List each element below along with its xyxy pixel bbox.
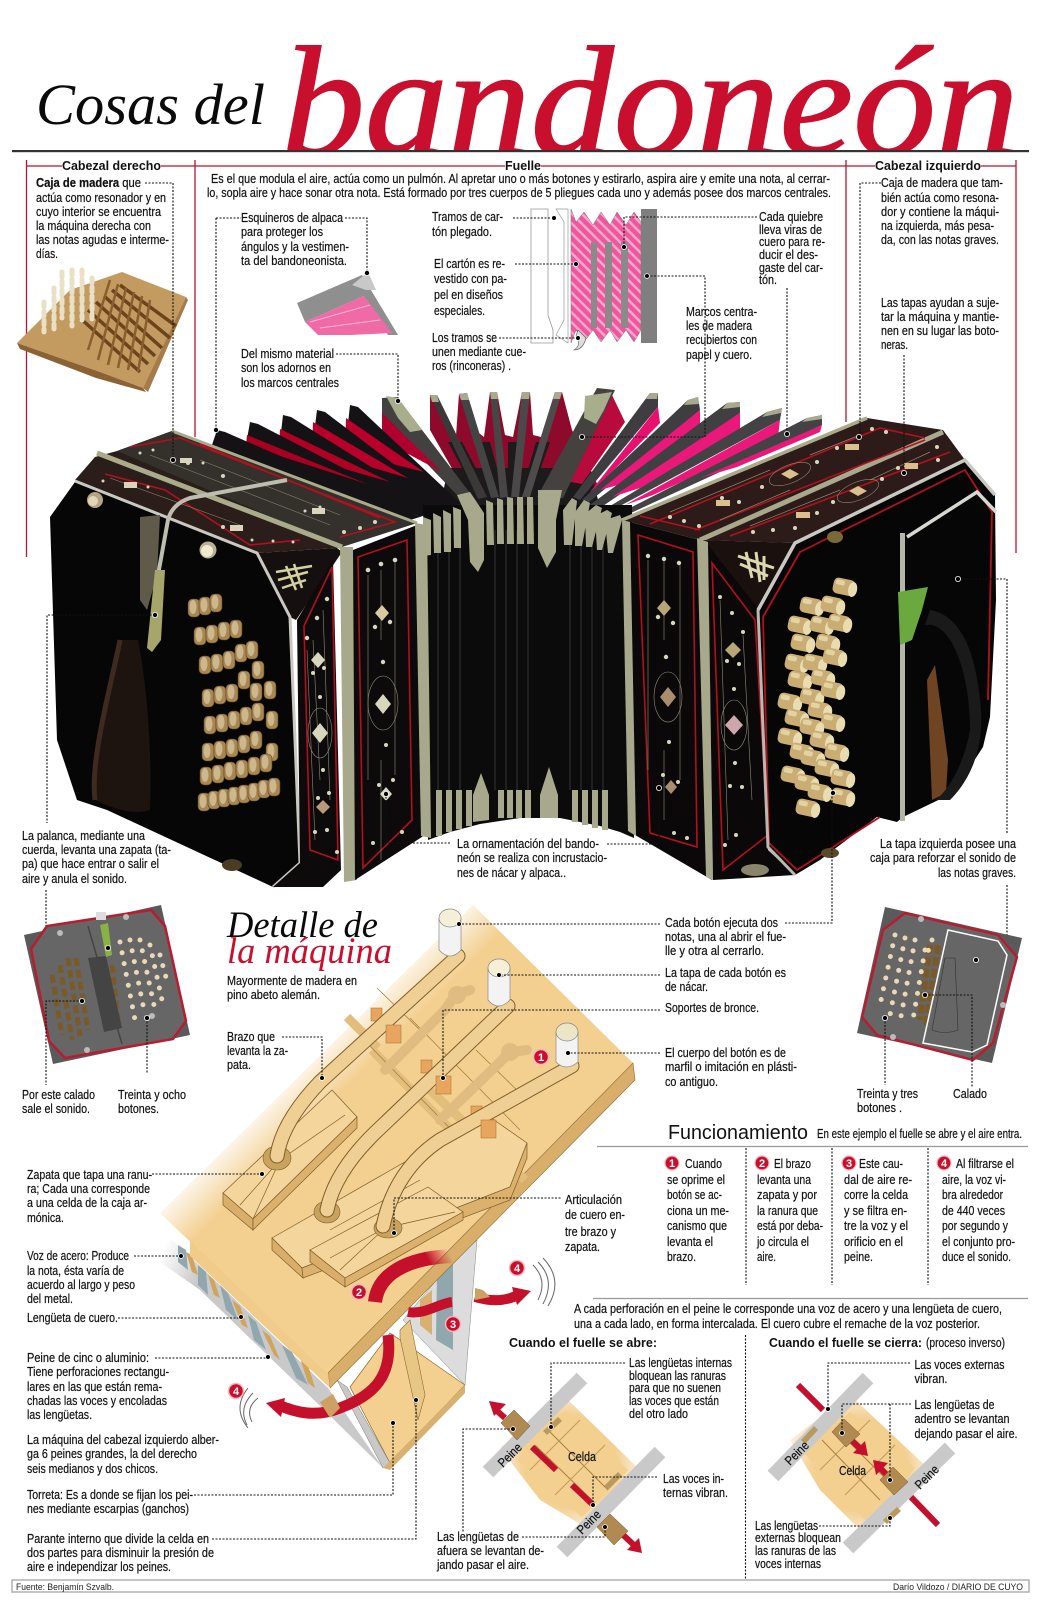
text: cabezal izquierdo: nen en su lugar las boto-	[881, 323, 999, 338]
leader lines: right-hand plate	[46, 945, 150, 1085]
text: lengüetas de afuera: Las lengüetas de	[437, 1529, 519, 1544]
text: brazo: Brazo que	[227, 1029, 275, 1044]
step 2	[755, 1156, 823, 1264]
text: voces externas: Las voces externas	[914, 1357, 1004, 1372]
step 4: 4	[941, 1158, 948, 1170]
title: Cosas del: Cosas del	[36, 72, 265, 137]
text: mechanism parts: aire e independizar los peines.	[27, 1559, 171, 1574]
text: esquineros	[241, 210, 349, 268]
step 4: Al filtrarse el	[956, 1156, 1014, 1171]
text: palanca: La palanca, mediante una	[22, 828, 146, 843]
text: mayormente: pino abeto alemán.	[227, 987, 320, 1002]
step 1: levanta el	[667, 1234, 713, 1249]
text: botón notes: La tapa de cada botón es	[665, 965, 786, 980]
text: lengüetas externas: voces internas	[755, 1556, 821, 1571]
text: lengüetas internas: las voces que están	[629, 1393, 719, 1408]
knobs and lever	[87, 492, 103, 508]
step badges on mechanism: 1	[538, 1052, 544, 1064]
text: articulación: tre brazo y	[565, 1224, 616, 1239]
text: mechanism parts: las lengüetas.	[27, 1407, 92, 1422]
text: mechanism parts: Peine de cinc o aluminio:	[27, 1350, 149, 1365]
label: Peine: Peine	[782, 1438, 812, 1468]
step 1: brazo.	[667, 1249, 696, 1264]
text: caja de madera derecha: días.	[36, 246, 58, 261]
text: lengüetas externas: externas bloquean	[755, 1530, 841, 1545]
text: treinta y ocho: botones.	[118, 1101, 159, 1116]
label: Celda: Celda	[568, 1449, 597, 1464]
text: lengüetas de adentro	[914, 1397, 1018, 1441]
text: brazo: pata.	[227, 1057, 251, 1072]
text: mechanism parts: acuerdo al largo y peso	[27, 1277, 135, 1292]
heading: Fuelle: Fuelle	[505, 158, 541, 173]
side panel D	[708, 545, 795, 880]
text: caja de madera derecha	[36, 175, 169, 261]
heading: cuando el fuelle se cierra: Cuando el fuelle se cierra:	[769, 1335, 922, 1350]
text: palanca: aire y anula el sonido.	[22, 871, 127, 886]
text: mechanism parts: mónica.	[27, 1210, 64, 1225]
text: cada quiebre: lleva viras de	[759, 222, 822, 237]
heading: detalle de la máquina: Detalle de	[226, 904, 378, 945]
photo: bandoneón	[50, 388, 996, 887]
step 4: aire, la voz vi-	[942, 1172, 1006, 1187]
front panel B	[353, 525, 425, 880]
step 2: aire.	[757, 1249, 776, 1264]
text: cabezal izquierdo: na izquierda, más pesa-	[881, 218, 994, 233]
heading: detalle de la máquina: la máquina	[227, 930, 392, 971]
step 2: El brazo	[774, 1156, 811, 1171]
diagram: left-hand plate	[857, 907, 1022, 1063]
text: palanca: pa) que hace entrar o salir el	[22, 856, 159, 871]
text: tramos: vestido con pa-	[434, 271, 507, 286]
text: cabezal izquierdo	[881, 175, 1003, 352]
step 1	[665, 1156, 729, 1264]
text: mechanism parts: ga 6 peines grandes, la del derecho	[27, 1446, 197, 1461]
text: voces externas: vibran.	[914, 1371, 948, 1386]
heading: Cabezal izquierdo: Cabezal izquierdo	[875, 158, 981, 173]
text: ornamentación: La ornamentación del bando-	[457, 836, 599, 851]
text: cada quiebre: cuero para re-	[759, 234, 825, 249]
step 2: está por deba-	[757, 1218, 823, 1233]
text: lengüetas internas: Las lengüetas internas	[629, 1355, 732, 1370]
text: fuelle intro	[207, 171, 831, 200]
text: voces externas	[914, 1357, 1004, 1386]
text: brazo	[227, 1029, 288, 1072]
text: botón notes: co antiguo.	[665, 1074, 718, 1089]
text: mechanism parts: lares en las que están rema-	[27, 1379, 162, 1394]
text: marcos centrales: les de madera	[686, 318, 753, 333]
text: caja de madera derecha: cuyo interior se encuentra	[36, 204, 162, 219]
text: botón notes: Soportes de bronce.	[665, 1000, 759, 1015]
text: tapa izquierda: caja para reforzar el sonido de	[870, 850, 1016, 865]
bellows front folds	[423, 490, 634, 840]
text: esquineros: ángulos y la vestimen-	[241, 239, 349, 254]
text: mayormente: Mayormente de madera en	[227, 973, 357, 988]
text: articulación: zapata.	[565, 1239, 600, 1254]
step 4: el conjunto pro-	[942, 1234, 1015, 1249]
text: cabezal izquierdo: neras.	[881, 337, 908, 352]
text: tramos: ros (rinconeras) .	[432, 358, 511, 373]
step badges on mechanism: 4	[514, 1263, 521, 1275]
text: botón notes: lle y otra al cerrarlo.	[665, 943, 764, 958]
text: mechanism parts: seis medianos y dos chicos.	[27, 1461, 158, 1476]
text: caja de madera derecha: actúa como resonador y en	[36, 190, 166, 205]
text: mechanism parts: Voz de acero: Produce	[27, 1248, 129, 1263]
text: lengüetas internas	[629, 1355, 732, 1421]
diagram: right-hand plate	[24, 905, 190, 1064]
text: marcos centrales	[686, 304, 757, 362]
lyre ornament right	[738, 552, 774, 582]
left box	[50, 431, 431, 887]
leader lines: mechanism	[118, 922, 660, 1539]
text: cada quiebre: tón.	[759, 272, 777, 287]
leader lines and dots, upper section	[46, 183, 1007, 960]
step 3: 3	[846, 1158, 852, 1170]
step 1: 1	[669, 1158, 675, 1170]
diagram: esquinero	[297, 272, 398, 335]
footer credits	[12, 1580, 1029, 1593]
text: tramos: Los tramos se	[432, 330, 497, 345]
text: lengüetas de afuera: jando pasar el aire.	[436, 1557, 529, 1572]
step 1: se oprime el	[667, 1172, 725, 1187]
text: articulación: de cuero en-	[565, 1207, 625, 1222]
step 3: Este cau-	[859, 1156, 903, 1171]
text: mechanism parts: del metal.	[27, 1291, 73, 1306]
text: cabezal izquierdo: da, con las notas graves.	[881, 232, 999, 247]
text: lengüetas de afuera: afuera se levantan de-	[437, 1543, 544, 1558]
text: perforación note	[574, 1298, 1028, 1331]
text: mechanism parts: Zapata que tapa una ranu-	[27, 1167, 152, 1182]
text: tramos: El cartón es re-	[434, 256, 505, 271]
step 1: canismo que	[667, 1218, 727, 1233]
text: treinta y tres: Treinta y tres	[857, 1086, 918, 1101]
text: tramos: Tramos de car-	[432, 209, 503, 224]
text: mechanism parts: chadas las voces y encoladas	[27, 1393, 167, 1408]
heading: funcionamiento: Funcionamiento	[668, 1122, 808, 1144]
text: palanca: cuerda, levanta una zapata (ta-	[22, 842, 171, 857]
photo: wooden right machine	[17, 270, 188, 392]
step 3: dal de aire re-	[844, 1172, 912, 1187]
step 3: corre la celda	[844, 1187, 909, 1202]
text: cabezal izquierdo: Caja de madera que tam-	[881, 175, 1003, 190]
step 2: zapata y por	[757, 1187, 818, 1202]
zapatas	[223, 1090, 527, 1287]
step 3: peine.	[844, 1249, 873, 1264]
text: mechanism parts: dos partes para disminuir la presión de	[27, 1545, 214, 1560]
text: caja de madera derecha: la máquina derecha con	[36, 218, 151, 233]
text: mechanism parts: Tiene perforaciones rectangu-	[27, 1364, 169, 1379]
front panel C	[622, 520, 712, 880]
text: lengüetas internas: para que no suenen	[629, 1380, 721, 1395]
label: Celda: Celda	[839, 1463, 867, 1478]
step badges on mechanism: 2	[356, 1287, 362, 1299]
diagram: fuelle se cierra	[773, 1378, 950, 1548]
source: Fuente: Benjamín Szvalb.	[16, 1582, 114, 1593]
cross bars and shadows	[347, 986, 527, 1190]
left buttons	[188, 594, 280, 811]
text: treinta y tres	[857, 1086, 918, 1115]
text: lengüetas de adentro: dejando pasar el aire.	[914, 1426, 1018, 1441]
step 4: de 440 veces	[942, 1203, 1005, 1218]
text: botón notes: notas, una al abrir el fue-	[665, 929, 786, 944]
title	[39, 44, 1014, 150]
text: fuelle intro: lo, sopla aire y hace sonar otra nota. Está formado por tres cuerpos de 5 pliegues cada uno y además posee dos marcos centrales.	[207, 185, 831, 200]
step 1: Cuando	[685, 1156, 722, 1171]
text: botón notes: marfil o imitación en plásti-	[665, 1059, 797, 1074]
title: bandoneón: bandoneón	[282, 15, 1019, 188]
arms	[277, 956, 572, 1226]
step 4: duce el sonido.	[942, 1249, 1011, 1264]
text: cabezal izquierdo: Las tapas ayudan a suje-	[881, 295, 999, 310]
text: botón notes: El cuerpo del botón es de	[665, 1045, 786, 1060]
text: lengüetas de afuera	[436, 1529, 544, 1572]
step 2: 2	[759, 1158, 765, 1170]
text: ornamentación: neón se realiza con incrustacio-	[457, 850, 607, 865]
text: cada quiebre	[759, 209, 825, 287]
text: caja de madera derecha: Caja de madera que	[36, 175, 141, 190]
heading: detalle de la máquina	[226, 904, 392, 971]
text: mechanism parts: nes mediante escarpias (ganchos)	[27, 1501, 189, 1516]
text: fuelle intro: Es el que modula el aire, actúa como un pulmón. Al apretar uno o más botones y estirarlo, aspira aire y emite una nota, al cerrar-	[211, 171, 830, 186]
lower box and combs	[160, 1228, 477, 1470]
text: treinta y tres: botones .	[857, 1100, 902, 1115]
text: calado derecha: Calado	[953, 1086, 987, 1101]
right box	[622, 418, 996, 880]
text: esquineros: Esquineros de alpaca	[241, 210, 344, 225]
heading: cuando el fuelle se cierra	[769, 1335, 1005, 1350]
diagram: fuelle en corte	[531, 209, 657, 350]
button cylinders	[439, 909, 578, 1067]
label: Peine: Peine	[912, 1462, 942, 1492]
text: mechanism parts: ra; Cada una corresponde	[27, 1181, 150, 1196]
text: cada quiebre: gaste del car-	[759, 260, 823, 275]
right face edges	[758, 460, 995, 610]
step 3	[842, 1156, 912, 1264]
text: tapa izquierda	[870, 836, 1017, 880]
strap	[94, 640, 150, 812]
text: brazo: levanta la za-	[227, 1043, 288, 1058]
lyre ornament	[276, 564, 312, 590]
text: adornos: los marcos centrales	[241, 375, 339, 390]
step 4: bra alrededor	[942, 1187, 1004, 1202]
heading: cuando el fuelle se abre: Cuando el fuelle se abre:	[509, 1335, 657, 1350]
text: esquineros: ta del bandoneonista.	[241, 253, 347, 268]
author: Darío Vildozo / DIARIO DE CUYO	[893, 1582, 1023, 1593]
diagram: machine mechanism	[160, 905, 635, 1470]
right buttons	[777, 577, 859, 819]
step 3: y se filtra en-	[844, 1203, 907, 1218]
text: calado izquierda: Por este calado	[22, 1087, 95, 1102]
text: lengüetas externas: Las lengüetas	[755, 1518, 818, 1533]
step 2: levanta una	[757, 1172, 812, 1187]
text: marcos centrales: recubiertos con	[686, 332, 757, 347]
bronze supports, front	[386, 1025, 496, 1138]
text: lengüetas de adentro: adentro se levantan	[914, 1411, 1010, 1426]
text: lengüetas externas	[755, 1518, 841, 1571]
strap and green tape	[927, 665, 948, 800]
step badges on mechanism	[228, 1050, 548, 1398]
text: palanca	[22, 828, 171, 886]
text: mechanism parts: la nota, ésta varía de	[27, 1263, 124, 1278]
text: tramos: especiales.	[434, 303, 485, 318]
text: adornos: son los adornos en	[241, 360, 331, 375]
step 1: botón se ac-	[667, 1187, 722, 1202]
text: cabezal izquierdo: tar la máquina y mantie-	[881, 309, 999, 324]
text: cabezal izquierdo: dor y contiene la máqui-	[881, 204, 999, 219]
text: mechanism parts	[27, 1167, 219, 1574]
text: treinta y ocho: Treinta y ocho	[118, 1087, 186, 1102]
step 4	[937, 1156, 1015, 1264]
text: lengüetas de adentro: Las lengüetas de	[914, 1397, 994, 1412]
text: cada quiebre: Cada quiebre	[759, 209, 823, 224]
text: mechanism parts: Parante interno que divide la celda en	[27, 1531, 209, 1546]
text: tapa izquierda: las notas graves.	[938, 865, 1016, 880]
leader lines: fuelle se cierra	[819, 1363, 911, 1526]
text: mechanism parts: a una celda de la caja ar-	[27, 1195, 147, 1210]
step 1: ciona un me-	[667, 1203, 729, 1218]
text: caja de madera derecha: las notas agudas e interme-	[36, 232, 169, 247]
text: botón notes: Cada botón ejecuta dos	[665, 915, 778, 930]
heading: cuando el fuelle se cierra: (proceso inverso)	[926, 1335, 1005, 1350]
heading: Cabezal derecho: Cabezal derecho	[62, 158, 161, 173]
text: ornamentación	[457, 836, 607, 880]
text: tramos: tón plegado.	[432, 224, 492, 239]
text: adornos: Del mismo material	[241, 346, 334, 361]
text: articulación: Articulación	[565, 1192, 622, 1207]
text: lengüetas externas: las ranuras de las	[755, 1543, 836, 1558]
text: mayormente	[227, 973, 357, 1002]
text: cabezal izquierdo: bién actúa como resona-	[881, 190, 999, 205]
text: calado izquierda: sale el sonido.	[22, 1101, 90, 1116]
text: mechanism parts: Lengüeta de cuero.	[27, 1310, 118, 1325]
text: voces internas: Las voces in-	[663, 1471, 724, 1486]
text: cada quiebre: ducir el des-	[759, 247, 818, 262]
text: voces internas: ternas vibran.	[663, 1485, 728, 1500]
text: botón notes: de nácar.	[665, 979, 708, 994]
text: tramos	[432, 209, 526, 373]
bronze supports, back	[371, 1008, 482, 1119]
leader lines: fuelle se abre	[463, 1363, 657, 1537]
sound arcs	[240, 1258, 555, 1428]
text: adornos	[241, 346, 339, 390]
side panel A	[273, 560, 341, 887]
text: tramos: pel en diseños	[434, 287, 503, 302]
diagram: fuelle se abre	[488, 1378, 660, 1553]
label: Peine: Peine	[574, 1507, 604, 1537]
section frames	[26, 158, 1016, 557]
bellows pleats, fan	[212, 388, 822, 520]
board	[160, 905, 633, 1373]
text: botón notes	[665, 915, 797, 1089]
step 3: tre la voz y el	[844, 1218, 908, 1233]
step badges on mechanism: 3	[450, 1319, 456, 1331]
text: voces internas	[663, 1471, 728, 1500]
title rule	[12, 150, 1029, 152]
step badges on mechanism: 4	[233, 1386, 240, 1398]
text: marcos centrales: Marcos centra-	[686, 304, 757, 319]
text: mechanism parts: Torreta: Es a donde se fijan los pei-	[27, 1487, 193, 1502]
text: ornamentación: nes de nácar y alpaca..	[457, 865, 566, 880]
panel: funcionamiento	[597, 1122, 1028, 1285]
text: lengüetas internas: del otro lado	[629, 1406, 688, 1421]
label: Peine: Peine	[495, 1440, 525, 1470]
red air arrows	[278, 1256, 522, 1413]
text: articulación	[565, 1192, 625, 1254]
step 2: la ranura que	[757, 1203, 818, 1218]
step 3: orificio en el	[844, 1234, 903, 1249]
text: treinta y ocho	[118, 1087, 186, 1116]
leader lines: left-hand plate	[882, 957, 979, 1087]
leather joints	[263, 1146, 291, 1170]
text: lengüetas internas: bloquean las ranuras	[629, 1368, 726, 1383]
text: esquineros: para proteger los	[241, 224, 323, 239]
text: tapa izquierda: La tapa izquierda posee una	[880, 836, 1017, 851]
text: marcos centrales: papel y cuero.	[686, 347, 752, 362]
text: calado izquierda	[22, 1087, 95, 1116]
text: tramos: unen mediante cue-	[432, 344, 526, 359]
step 2: jo circula el	[756, 1234, 809, 1249]
text: mechanism parts: La máquina del cabezal izquierdo alber-	[27, 1432, 219, 1447]
step 4: por segundo y	[942, 1218, 1008, 1233]
